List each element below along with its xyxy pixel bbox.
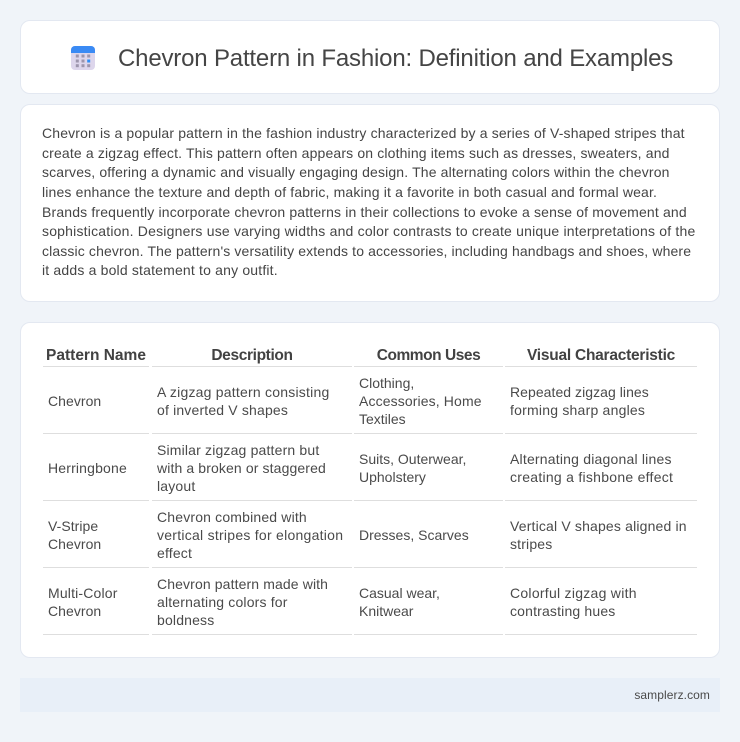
- row: Herringbone: with a broken or staggered: [157, 460, 326, 476]
- intro paragraph: [42, 125, 695, 278]
- row: Herringbone: Similar zigzag pattern but: [157, 442, 319, 458]
- row: Multi-Color Chevron: Multi-Color: [48, 585, 118, 601]
- row: Multi-Color Chevron: Chevron: [48, 603, 101, 619]
- row: Chevron: A zigzag pattern consisting: [157, 384, 329, 400]
- intro paragraph: it adds a bold statement to any outfit.: [42, 262, 278, 278]
- row: Multi-Color Chevron: Colorful zigzag with: [510, 585, 637, 601]
- row: V-Stripe Chevron: [43, 509, 697, 568]
- row: Chevron: forming sharp angles: [510, 402, 645, 418]
- row: Multi-Color Chevron: Casual wear,: [359, 585, 440, 601]
- row: Chevron: Textiles: [359, 411, 406, 427]
- table header: Common Uses: [377, 347, 480, 364]
- footer source text: samplerz.com: [634, 688, 710, 702]
- row: V-Stripe Chevron: Chevron: [48, 536, 101, 552]
- panel: introduction: [20, 104, 720, 302]
- table header: Description: [211, 347, 293, 364]
- row: V-Stripe Chevron: Chevron combined with: [157, 509, 307, 525]
- row: Herringbone: Herringbone: [48, 460, 127, 476]
- panel: header: [20, 20, 720, 94]
- row: Herringbone: creating a fishbone effect: [510, 469, 673, 485]
- intro paragraph: scarves, offering a dynamic and visually engaging design. The alternating colors within the chevron: [42, 164, 670, 180]
- row: V-Stripe Chevron: Dresses, Scarves: [359, 527, 469, 543]
- row: Multi-Color Chevron: [43, 576, 697, 635]
- row: V-Stripe Chevron: effect: [157, 545, 192, 561]
- intro paragraph: create a zigzag effect. This pattern often appears on clothing items such as dresses, sweaters, and: [42, 145, 670, 161]
- row: Herringbone: [43, 442, 697, 501]
- row: Herringbone: Upholstery: [359, 469, 426, 485]
- row: V-Stripe Chevron: Vertical V shapes aligned in: [510, 518, 687, 534]
- intro paragraph: lines enhance the texture and depth of fabric, making it a favorite in both casual and formal wear.: [42, 184, 657, 200]
- row: Herringbone: layout: [157, 478, 195, 494]
- row: Multi-Color Chevron: Chevron pattern made with: [157, 576, 328, 592]
- row: Chevron: Repeated zigzag lines: [510, 384, 649, 400]
- intro paragraph: Brands frequently incorporate chevron patterns in their collections to evoke a sense of movement and: [42, 204, 687, 220]
- intro paragraph: classic chevron. The pattern's versatility extends to accessories, including handbags and shoes, where: [42, 243, 691, 259]
- row: Herringbone: Suits, Outerwear,: [359, 451, 466, 467]
- title: Chevron Pattern in Fashion: Definition and Examples: [118, 45, 673, 72]
- row: V-Stripe Chevron: vertical stripes for elongation: [157, 527, 343, 543]
- footer: [20, 678, 720, 712]
- intro paragraph: Chevron is a popular pattern in the fashion industry characterized by a series of V-shaped stripes that: [42, 125, 685, 141]
- row: Herringbone: Alternating diagonal lines: [510, 451, 672, 467]
- row: Chevron: Chevron: [48, 393, 101, 409]
- table header: Pattern Name: [46, 347, 146, 364]
- row: V-Stripe Chevron: V-Stripe: [48, 518, 98, 534]
- row: Multi-Color Chevron: Knitwear: [359, 603, 413, 619]
- row: V-Stripe Chevron: stripes: [510, 536, 552, 552]
- row: Chevron: of inverted V shapes: [157, 402, 288, 418]
- icon: calendar: [71, 46, 95, 70]
- row: Chevron: Clothing,: [359, 375, 414, 391]
- row: Multi-Color Chevron: boldness: [157, 612, 214, 628]
- panel: pattern table: [20, 322, 720, 658]
- row: Multi-Color Chevron: contrasting hues: [510, 603, 615, 619]
- row: Multi-Color Chevron: alternating colors for: [157, 594, 288, 610]
- row: Chevron: [43, 375, 697, 434]
- table header: [43, 347, 697, 367]
- intro paragraph: sophistication. Designers use varying widths and color contrasts to create unique interpretations of the: [42, 223, 695, 239]
- table header: Visual Characteristic: [527, 347, 675, 364]
- row: Chevron: Accessories, Home: [359, 393, 482, 409]
